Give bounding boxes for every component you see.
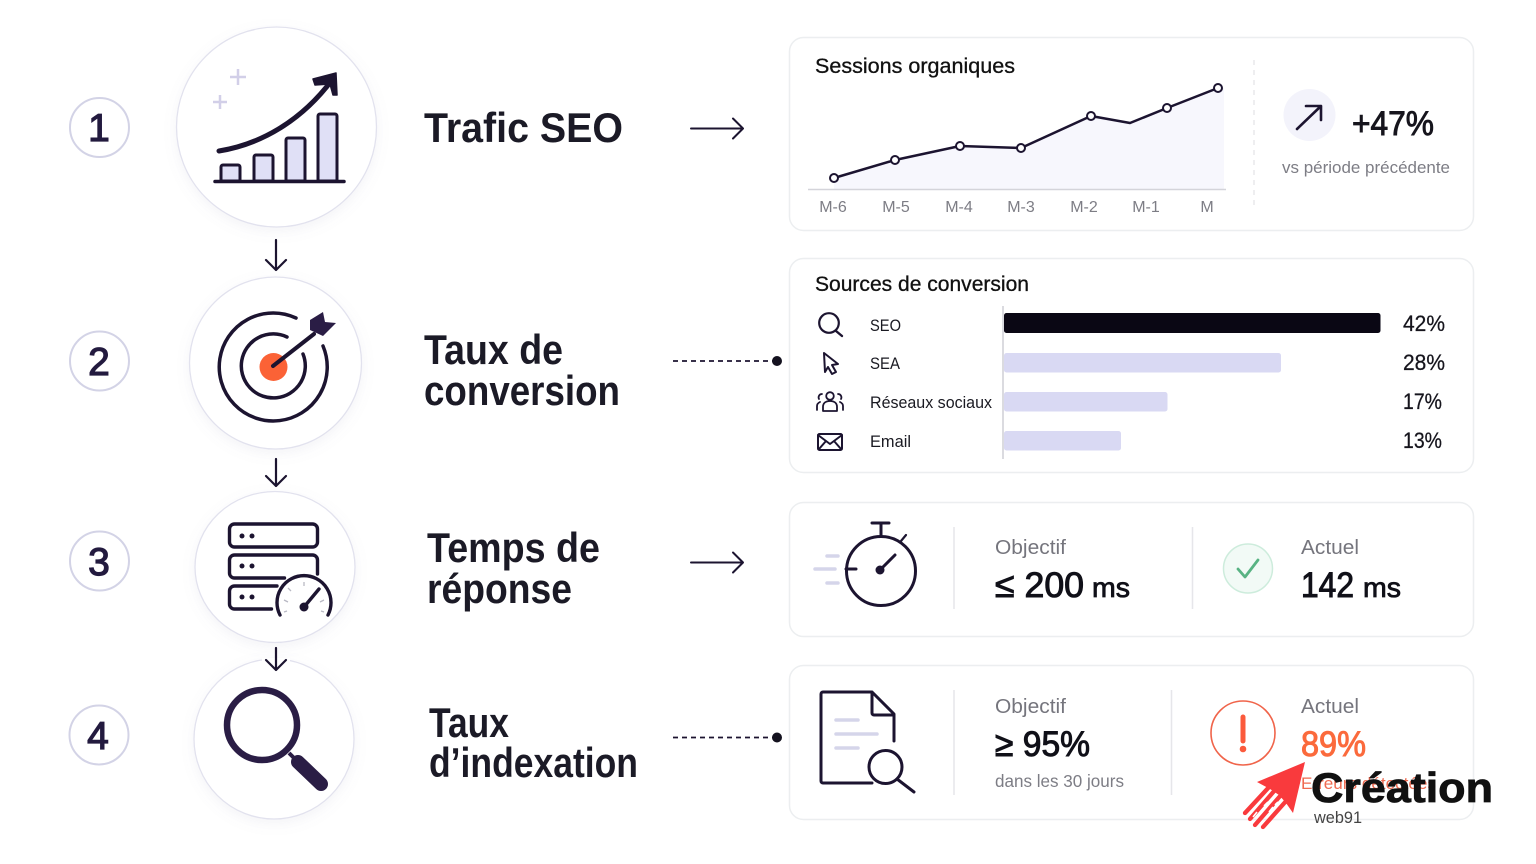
actuel block: Actuel [1301, 695, 1359, 718]
icon: alert [1211, 701, 1275, 765]
row: réseaux sociaux [817, 389, 1442, 414]
title: Trafic SEO: Trafic SEO [424, 104, 623, 151]
step 3 number badge: 3 [88, 541, 110, 584]
panel: temps de réponse [790, 502, 1474, 636]
objectif block [995, 536, 1130, 605]
icon: stopwatch [815, 523, 916, 606]
step 2 number badge [70, 332, 129, 390]
icon: check [1224, 544, 1272, 593]
panel heading: Sources de conversion [815, 273, 1029, 296]
step 1 number badge [70, 98, 129, 157]
dashed connector: title 2 to card [673, 356, 782, 366]
actuel block: Erreurs détectées [1301, 774, 1436, 793]
icon: servers and gauge in circle [195, 492, 355, 642]
title: Taux de conversion: conversion [424, 367, 620, 414]
dashed connector: title 4 to card [673, 732, 782, 742]
panel heading: Sessions organiques [815, 55, 1015, 78]
row: SEO: SEO [870, 317, 901, 335]
panel: taux d'indexation [790, 666, 1474, 820]
objectif block: ms [1092, 572, 1130, 603]
actuel block [1301, 536, 1401, 605]
actuel block: ms [1363, 572, 1401, 603]
title: Temps de réponse: réponse [427, 565, 572, 612]
title: Taux d'indexation [429, 699, 638, 786]
row: réseaux sociaux: Réseaux sociaux [870, 394, 993, 412]
actuel block: Actuel [1301, 536, 1359, 559]
step 4 number badge [70, 706, 128, 764]
icon: document search [821, 692, 914, 792]
title: Temps de réponse [427, 524, 600, 612]
logo: Création web91: Création [1311, 764, 1493, 811]
logo: Création web91: web91 [1313, 809, 1362, 827]
icon: growth chart in circle [176, 27, 376, 227]
line chart: M-4 [945, 199, 973, 216]
title: Taux d'indexation: d’indexation [429, 739, 638, 786]
panel: sessions organiques [790, 38, 1474, 230]
arrow: title 1 to card [691, 118, 743, 138]
row: email: Email [870, 433, 911, 451]
line chart: M-6 [819, 199, 847, 216]
row: SEA: SEA [870, 355, 900, 373]
line chart: M-1 [1132, 199, 1160, 216]
title: Taux d'indexation: Taux [429, 699, 510, 746]
objectif block: Objectif [995, 695, 1066, 718]
logo: Création web91 [1245, 762, 1493, 827]
objectif block: ≥ 95% [995, 725, 1090, 764]
line chart: M-3 [1007, 199, 1035, 216]
icon: magnifier in circle [194, 659, 354, 819]
panel: sources de conversion [790, 258, 1474, 472]
line chart [808, 84, 1226, 216]
icon: trend up arrow [1284, 89, 1336, 141]
title: Taux de conversion [424, 326, 620, 414]
row: SEA [824, 350, 1445, 375]
line chart: M [1200, 199, 1214, 216]
step 2 number badge: 2 [88, 341, 110, 384]
step 3 number badge [70, 532, 129, 590]
icon: target in circle [190, 277, 362, 449]
title: Temps de réponse: Temps de [427, 524, 600, 571]
actuel block [1301, 695, 1436, 793]
objectif block [995, 695, 1124, 791]
stat: +47%: +47% [1352, 105, 1434, 143]
row: SEO: 42% [1403, 311, 1445, 336]
line chart: M-2 [1070, 199, 1098, 216]
step 1 number badge: 1 [88, 107, 110, 150]
arrow: step 3 to 4 [262, 648, 290, 670]
row: email: 13% [1403, 428, 1442, 453]
objectif block: ≤ 200 [995, 566, 1084, 605]
row: email [818, 428, 1442, 453]
actuel block: 142 [1301, 566, 1354, 605]
arrow: title 3 to card [691, 552, 743, 572]
objectif block: dans les 30 jours [995, 771, 1124, 791]
line chart: M-5 [882, 199, 910, 216]
objectif block: Objectif [995, 536, 1066, 559]
arrow: step 1 to 2 [266, 240, 286, 270]
arrow: step 2 to 3 [266, 459, 286, 486]
actuel block: 89% [1301, 725, 1366, 764]
row: SEO [819, 311, 1445, 336]
caption: vs période précédente [1282, 158, 1450, 177]
step 4 number badge: 4 [87, 715, 109, 758]
row: SEA: 28% [1403, 350, 1445, 375]
row: réseaux sociaux: 17% [1403, 389, 1442, 414]
title: Taux de conversion: Taux de [424, 326, 563, 373]
